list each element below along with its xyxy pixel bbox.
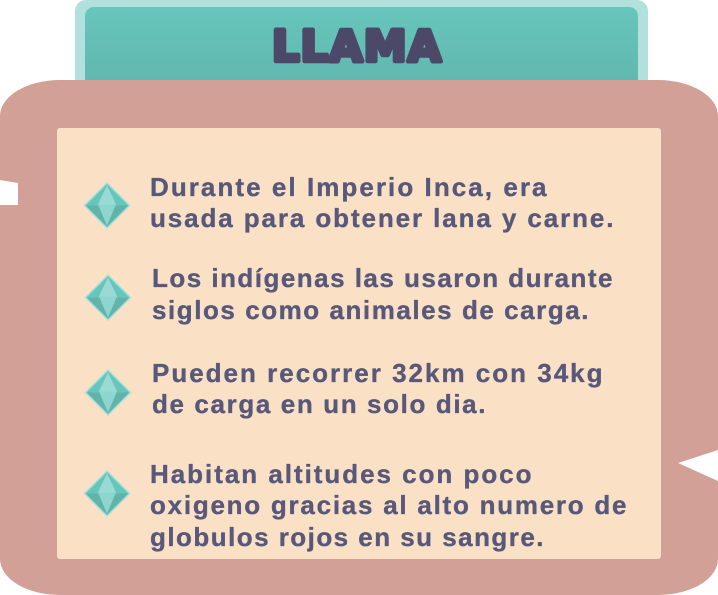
item 2	[84, 263, 612, 325]
icon: diamond	[84, 369, 132, 416]
text block 3	[152, 358, 602, 419]
text block 2: Los indígenas las usaron durante	[152, 263, 612, 293]
text block 4: Habitan altitudes con poco	[150, 459, 532, 489]
title tab	[75, 0, 648, 100]
tab outer border	[75, 0, 648, 100]
text block 2	[152, 263, 612, 325]
cream content card	[57, 128, 661, 559]
text block 1: usada para obtener lana y carne.	[150, 203, 614, 233]
title: LLAMA	[272, 22, 443, 72]
text block 3: Pueden recorrer 32km con 34kg	[152, 358, 602, 388]
item 4	[84, 459, 626, 552]
text block 2: siglos como animales de carga.	[152, 295, 588, 325]
icon: diamond	[84, 470, 130, 517]
text block 4: oxigeno gracias al alto numero de	[150, 490, 626, 520]
tab inner fill	[85, 7, 638, 100]
text block 1	[150, 172, 614, 233]
text block 1: Durante el Imperio Inca, era	[150, 172, 547, 202]
icon: diamond	[84, 182, 130, 229]
item 3	[84, 358, 602, 419]
text block 4	[150, 459, 626, 552]
left notch	[0, 180, 18, 205]
text block 4: globulos rojos en su sangre.	[150, 522, 544, 552]
text block 3: de carga en un solo dia.	[152, 389, 486, 419]
item 1	[84, 172, 614, 233]
icon: diamond	[84, 274, 132, 321]
right notch	[678, 450, 718, 481]
